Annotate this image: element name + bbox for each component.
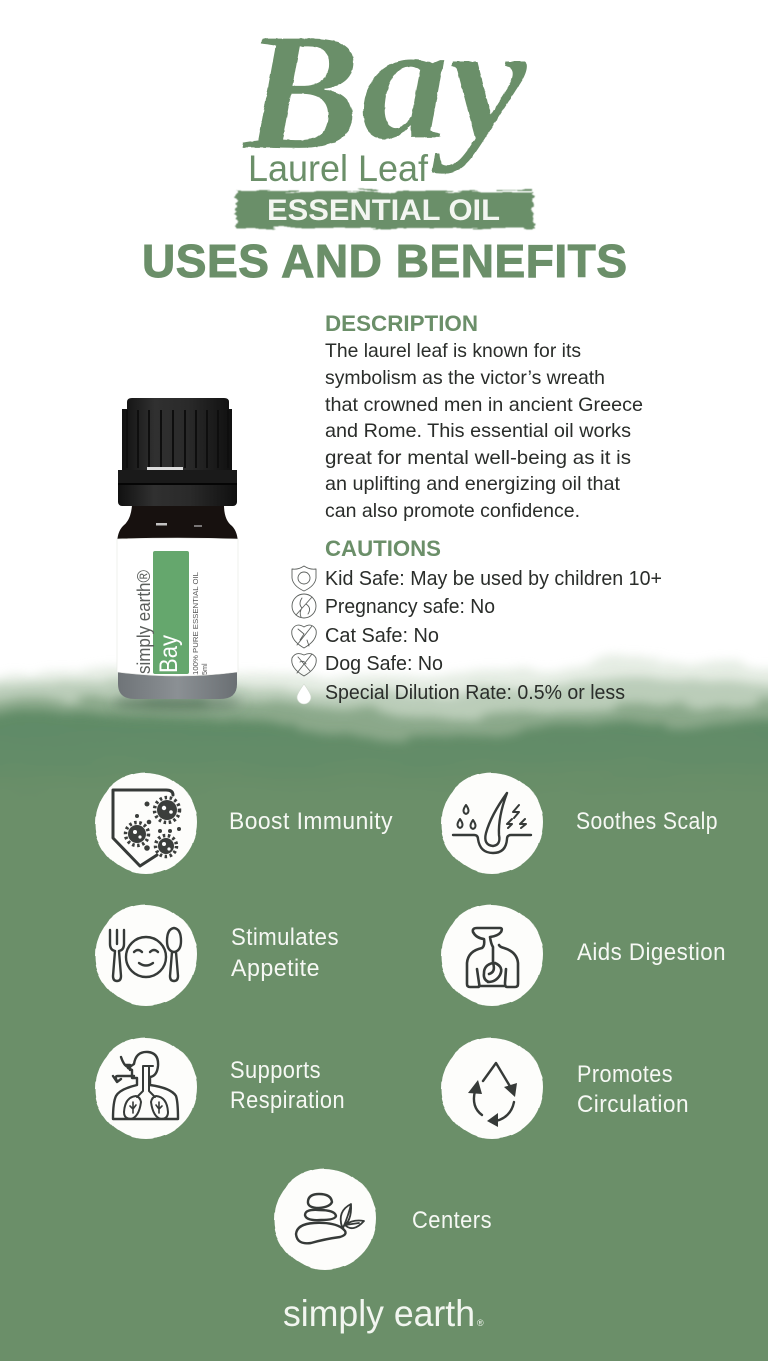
description text: an uplifting and energizing oil that <box>325 473 621 495</box>
badge: plate face icon <box>95 904 197 1006</box>
description text <box>325 340 643 522</box>
label: Appetite <box>231 955 320 982</box>
heading: Cautions: CAUTIONS <box>325 536 441 561</box>
white label <box>117 538 238 676</box>
description text: great for mental well-being as it is <box>325 447 631 469</box>
description text: The laurel leaf is known for its <box>325 340 581 362</box>
badge: stacked stones icon <box>274 1168 376 1270</box>
description panel <box>325 311 643 522</box>
label: Stimulates <box>231 924 339 951</box>
label text: simply earth: simply earth® <box>134 570 154 674</box>
brand logo: simply earth: ® <box>477 1318 484 1328</box>
label: Soothes Scalp <box>576 808 718 835</box>
product bottle photo <box>112 398 244 710</box>
brand logo: simply earth: simply earth <box>283 1293 475 1334</box>
cautions panel <box>292 536 662 704</box>
label text: 100% pure essential oil: 100% PURE ESSENTIAL OIL <box>191 572 200 675</box>
badge: lungs icon <box>95 1037 197 1139</box>
green label panel <box>153 551 189 674</box>
caution: dog: Dog Safe: No <box>325 653 443 675</box>
label text: 5ml: 5ml <box>200 663 209 675</box>
badge: digestive tract icon <box>441 904 543 1006</box>
caution: kid safe: Kid Safe: May be used by children 10+ <box>325 568 662 590</box>
caution: dilution: Special Dilution Rate: 0.5% or less <box>325 682 625 704</box>
label: Circulation <box>577 1091 689 1118</box>
benefit: supports respiration <box>95 1037 345 1139</box>
label: Supports <box>230 1057 321 1084</box>
benefit: promotes circulation <box>441 1037 689 1139</box>
cap ring <box>118 470 237 506</box>
benefit: centers <box>274 1168 492 1270</box>
caution: cat: Cat Safe: No <box>325 625 439 647</box>
label <box>230 1057 345 1114</box>
description text: symbolism as the victor’s wreath <box>325 367 605 389</box>
heading: Description: DESCRIPTION <box>325 311 478 336</box>
label: Aids Digestion <box>577 939 726 966</box>
label: Boost Immunity <box>229 808 393 835</box>
description text: can also promote confidence. <box>325 500 580 522</box>
label: Centers <box>412 1207 492 1234</box>
description text: and Rome. This essential oil works <box>325 420 631 442</box>
glass neck <box>117 505 238 552</box>
banner text: Essential Oil: ESSENTIAL OIL <box>267 194 500 227</box>
badge: scalp icon <box>441 772 543 874</box>
benefit: soothes scalp <box>441 772 718 874</box>
description text: that crowned men in ancient Greece <box>325 394 643 416</box>
title block <box>142 0 627 287</box>
label: Promotes <box>577 1061 673 1088</box>
caution: pregnancy: Pregnancy safe: No <box>325 596 495 618</box>
brush stroke banner <box>236 191 533 228</box>
ribbed cap <box>122 398 232 470</box>
badge: shield icon <box>95 772 197 874</box>
heading: Uses and Benefits: USES AND BENEFITS <box>142 235 627 287</box>
benefit: stimulates appetite <box>95 904 339 1006</box>
subtitle: Laurel Leaf: Laurel Leaf <box>248 148 429 189</box>
bottle base <box>118 665 237 699</box>
badge: circulation drop icon <box>441 1037 543 1139</box>
title: Bay: B <box>243 0 355 185</box>
benefit: boost immunity <box>95 772 393 874</box>
bottle shadow <box>112 694 244 710</box>
label: Respiration <box>230 1087 345 1114</box>
benefit: aids digestion <box>441 904 726 1006</box>
label text: Bay: Bay <box>155 635 183 673</box>
label <box>577 1061 689 1118</box>
label <box>231 924 339 982</box>
